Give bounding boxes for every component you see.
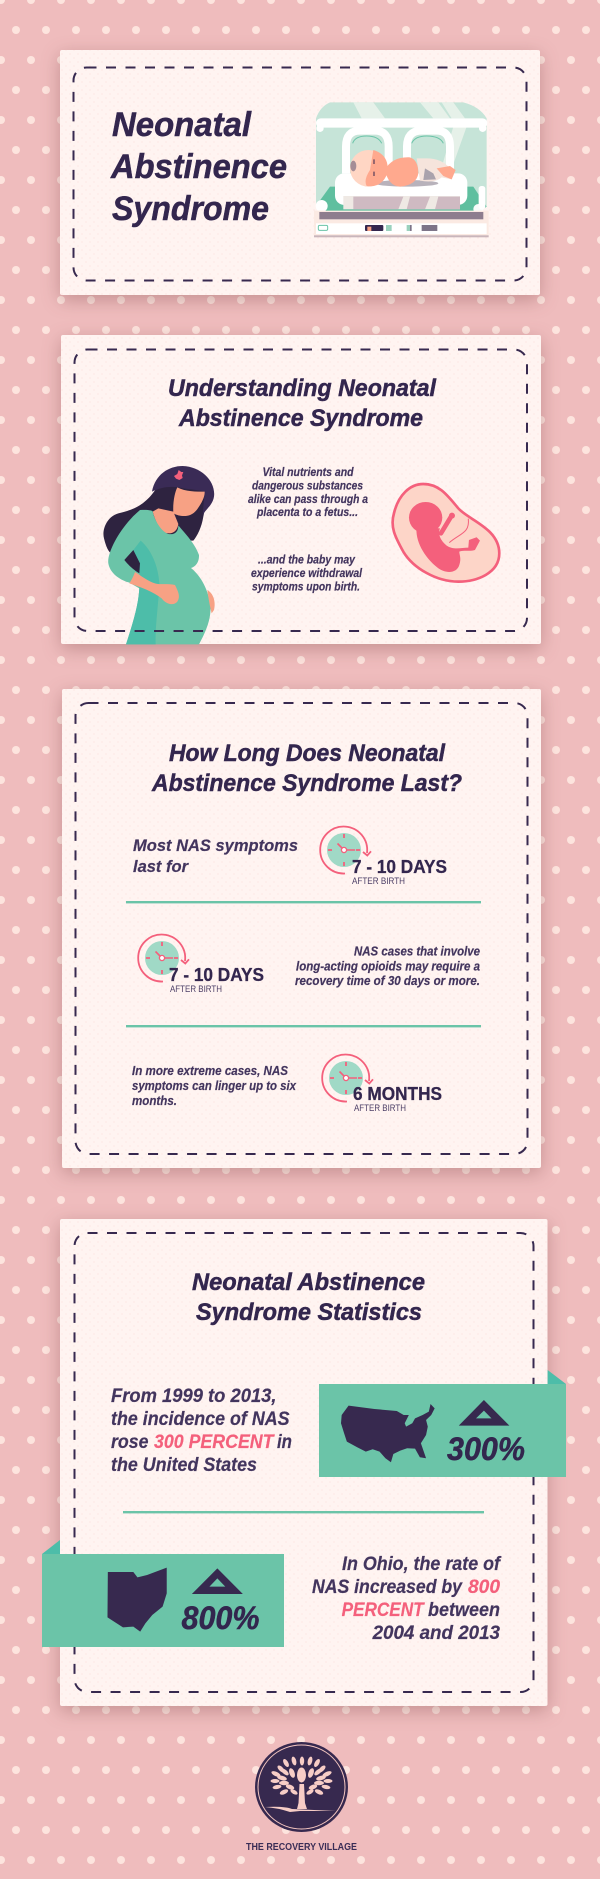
text: Ohio statistic [312, 1553, 502, 1644]
icon: clock 3 [322, 1055, 373, 1102]
text: national statistic: rose [111, 1431, 149, 1453]
heading: How Long Does Neonatal [169, 740, 446, 767]
stat: 300 percent: 300% [447, 1431, 525, 1467]
heading [192, 1269, 425, 1326]
text: long-acting opioids: long-acting opioids may require a [296, 960, 480, 974]
icon: baby in incubator [314, 102, 489, 237]
text: Ohio statistic: 2004 and 2013 [372, 1622, 500, 1644]
banner: USA 300 percent [319, 1370, 566, 1477]
text: Ohio statistic: PERCENT [342, 1599, 425, 1621]
text: long-acting opioids: recovery time of 30 days or more. [295, 974, 480, 988]
stat: 7-10 days: 7 - 10 DAYS [352, 856, 447, 877]
stat: 7-10 days: AFTER BIRTH [352, 876, 405, 887]
text: nutrients [248, 465, 368, 519]
text: long-acting opioids: NAS cases that involve [354, 944, 480, 958]
main title: Abstinence [110, 148, 287, 186]
main title [110, 106, 287, 228]
text: extreme cases: In more extreme cases, NAS [132, 1063, 288, 1078]
text: withdrawal: ...and the baby may [258, 552, 356, 566]
heading: Abstinence Syndrome [178, 405, 423, 432]
text: Ohio statistic: NAS increased by [312, 1576, 463, 1598]
text: Ohio statistic: In Ohio, the rate of [342, 1553, 502, 1575]
text: withdrawal: symptoms upon birth. [252, 580, 360, 594]
text: most symptoms: Most NAS symptoms [133, 836, 298, 855]
heading [168, 375, 437, 432]
icon: up triangle [459, 1400, 509, 1426]
text: national statistic: the United States [111, 1454, 257, 1476]
stat: 6 months: AFTER BIRTH [354, 1103, 406, 1114]
main title: Neonatal [112, 106, 252, 144]
stat: 7-10 days second: 7 - 10 DAYS [169, 964, 264, 985]
panel: understanding NAS [61, 335, 541, 644]
text: Ohio statistic: 800 [468, 1576, 500, 1598]
banner: Ohio 800 percent [42, 1540, 284, 1647]
text: withdrawal [251, 552, 363, 594]
icon: clock 1 [320, 827, 371, 874]
text: national statistic: in [277, 1431, 292, 1453]
heading: Understanding Neonatal [168, 375, 437, 402]
text: national statistic: the incidence of NAS [111, 1408, 290, 1430]
text: national statistic: 300 PERCENT [154, 1431, 275, 1453]
text: nutrients: Vital nutrients and [262, 465, 354, 479]
heading: Syndrome Statistics [196, 1299, 422, 1326]
stat: 7-10 days [352, 856, 447, 887]
icon: fetus in womb [393, 484, 499, 582]
text: withdrawal: experience withdrawal [251, 566, 363, 580]
heading [151, 740, 462, 797]
text: most symptoms [133, 836, 298, 876]
icon: pregnant woman [103, 466, 215, 644]
main title: Syndrome [112, 190, 269, 228]
text: national statistic: From 1999 to 2013, [111, 1385, 276, 1407]
stat: 7-10 days second [169, 964, 264, 995]
text: extreme cases: months. [132, 1093, 177, 1108]
stat: 800 percent: 800% [182, 1600, 260, 1636]
text: nutrients: placenta to a fetus... [256, 505, 358, 519]
heading: Abstinence Syndrome Last? [151, 770, 462, 797]
heading: Neonatal Abstinence [192, 1269, 425, 1296]
logo: The Recovery Village: THE RECOVERY VILLAGE [246, 1842, 357, 1853]
panel: how long does NAS last [62, 689, 541, 1168]
stat: 7-10 days second: AFTER BIRTH [170, 984, 222, 995]
icon: clock 2 [138, 935, 189, 982]
panel: title [60, 50, 540, 295]
panel: statistics [42, 1219, 566, 1706]
text: extreme cases: symptoms can linger up to six [132, 1078, 297, 1093]
text: nutrients: alike can pass through a [248, 492, 368, 506]
logo: The Recovery Village [246, 1742, 357, 1853]
stat: 6 months: 6 MONTHS [353, 1083, 442, 1104]
text: nutrients: dangerous substances [252, 478, 363, 492]
icon: Ohio map [107, 1568, 167, 1632]
icon: USA map [341, 1404, 435, 1462]
text: long-acting opioids [295, 944, 480, 988]
text: extreme cases [132, 1063, 297, 1108]
icon: up triangle [192, 1568, 243, 1594]
text: most symptoms: last for [133, 857, 189, 876]
stat: 6 months [353, 1083, 442, 1114]
text: Ohio statistic: between [428, 1599, 500, 1621]
text: national statistic [111, 1385, 292, 1476]
